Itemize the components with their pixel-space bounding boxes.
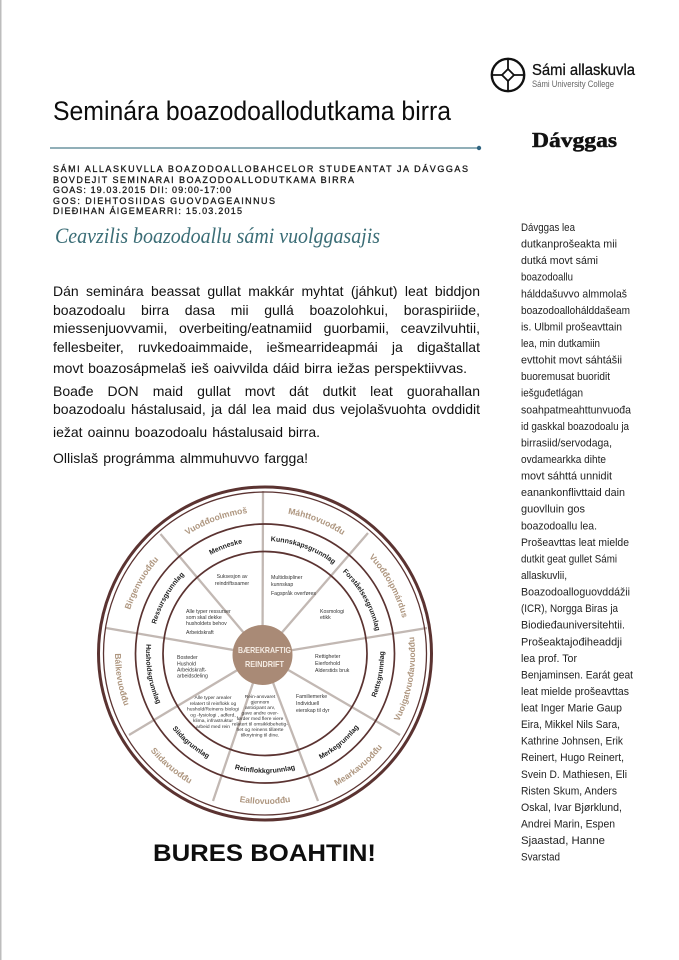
side column text: Prošeavttas leat mielde — [521, 537, 629, 549]
body paragraphs: boazodoalu birra dasa mii gullá boazolohkui, boraspiriide, — [53, 302, 480, 318]
inner sector notes: Arbeidskraft — [186, 630, 214, 636]
inner sector notes: husholdets behov — [186, 621, 227, 627]
side column text: Kathrine Johnsen, Erik — [521, 736, 624, 748]
side column text: buoremusat buoridit — [521, 371, 610, 383]
center: BÆREKRAFTIG REINDRIFT: BÆREKRAFTIG — [238, 645, 291, 655]
inner sector notes: Rein-ansvaret — [245, 694, 276, 700]
inner sector notes: Eierforhold — [315, 661, 340, 667]
inner sector notes: Alderstids bruk — [315, 668, 350, 674]
body paragraphs: boazodoalu hástalusaid, ja dál lea maid dus vejolašvuohta ovddidit — [53, 401, 480, 417]
inner sector notes: relatert til reinflokk og — [190, 701, 237, 707]
side column text: Sjaastad, Hanne — [521, 835, 605, 847]
side column text: iešguđetlágan — [521, 388, 583, 400]
side column text: Andrei Marin, Espen — [521, 818, 615, 830]
side column text: Biodieđauniversitehtii. — [521, 620, 625, 632]
center: BÆREKRAFTIG REINDRIFT — [232, 625, 292, 685]
body paragraphs: Ollislaš prográmma almmuhuvvo fargga! — [53, 450, 308, 466]
side column text: Dávggas lea — [521, 222, 575, 234]
inner sector notes: Multidisipliner — [271, 575, 303, 581]
event details — [53, 164, 468, 216]
event details: DIEÐIHAN ÁIGEMEARRI: 15.03.2015 — [53, 206, 242, 216]
side column text: Svein D. Mathiesen, Eli — [521, 769, 627, 781]
closing slogan: BURES BOAHTIN! — [153, 840, 376, 867]
inner sector notes: Suksesjon av — [217, 574, 248, 580]
event details: BOVDEJIT SEMINARAI BOAZODOALLODUTKAMA BIRRA — [53, 175, 354, 185]
side column text: movt sáhttá unnidit — [521, 471, 612, 483]
side column text: boazodoallohálddašeam — [521, 305, 630, 317]
side column text: id gaskkal boazodoalu ja — [521, 421, 629, 433]
inner sector notes: Familiemerke — [296, 694, 327, 700]
outer ring labels: Máhttovuođđu — [288, 508, 344, 535]
side column text: evttohit movt sáhtášii — [521, 355, 622, 367]
inner sector notes: Fagspråk overføres — [271, 590, 316, 597]
inner sector notes: som skal dekke — [186, 615, 222, 621]
middle ring labels: Kunnskapsgrunnlag — [271, 536, 336, 564]
body paragraphs: fellesbeiter, ruvkedoaimmaide, iešmearrideapmái ja digaštallat — [53, 339, 480, 355]
inner sector notes: Alle typer arealer — [195, 695, 232, 701]
side column text: lea, min dutkamiin — [521, 338, 600, 350]
inner sector notes: Kosmologi — [320, 609, 344, 615]
event details: GOS: DIEHTOSIIDAS GUOVDAGEAINNUS — [53, 196, 275, 206]
side column text: lea prof. Tor — [521, 653, 577, 665]
logo: Sámi allaskuvla — [492, 59, 635, 91]
outer ring labels: Eallovuođđu — [240, 796, 290, 804]
side column text: leat mielde prošeavttas — [521, 686, 629, 698]
logo: Sámi allaskuvla: Sámi University College — [532, 79, 614, 90]
inner sector notes: reindriftssamer — [215, 581, 249, 587]
body paragraphs: miessenjuovvamii, overbeiting/eatnamiid guorbamii, ceavzilvuhtii, — [53, 320, 480, 336]
inner sector notes: kunnskap — [271, 582, 293, 588]
side column text: Eira, Mikkel Nils Sara, — [521, 719, 620, 731]
header rule with dot — [50, 146, 481, 150]
center: BÆREKRAFTIG REINDRIFT: REINDRIFT — [245, 659, 285, 669]
inner sector notes: etikk — [320, 615, 331, 621]
outer ring labels: Vuoigatvuođavuođđu — [394, 637, 416, 720]
middle ring labels: Menneske — [208, 540, 242, 555]
middle ring labels: Rettsgrunnlag — [371, 652, 386, 698]
middle ring labels — [146, 536, 386, 774]
side column text: dutkit geat gullet Sámi — [521, 553, 617, 565]
inner sector notes: gjennom — [251, 700, 269, 706]
side column text: eanankonflivttaid dain — [521, 487, 625, 499]
side column text: Svarstad — [521, 852, 560, 864]
inner sector notes: Hushold — [177, 662, 196, 668]
outer ring labels: Vuođđoipmárdus — [370, 553, 406, 618]
side column text: hálddašuvvo almmolaš — [521, 288, 627, 300]
side column text: ovdamearkka dihte — [521, 454, 606, 466]
body paragraphs: Dán seminára beassat gullat makkár myhtat (jáhkut) leat biddjon — [53, 283, 480, 299]
side column text: birrasiid/servodaga, — [521, 437, 612, 449]
inner sector notes: førder med flere viere — [237, 716, 284, 722]
side column text — [521, 222, 633, 864]
outer ring labels: Siidavuođđu — [151, 748, 192, 784]
middle ring labels: Reinflokkgrunnlag — [235, 764, 295, 774]
body paragraphs: iežat oainnu boazodoalu hástalusaid birra. — [53, 424, 320, 440]
inner sector notes: tilknytning til dine. — [241, 732, 279, 738]
title: Seminára boazodoallodutkama birra — [53, 96, 451, 126]
middle ring labels: Husholdsgrunnlag — [146, 644, 160, 704]
inner sector notes — [177, 574, 350, 738]
outer ring labels: Birgenvuođđu — [124, 557, 158, 610]
body paragraphs: movt boazosápmelaš ieš oaivvilda dáid birra iežas perspektiivvas. — [53, 360, 467, 376]
middle ring labels: Merkegrunnlag — [318, 725, 360, 759]
outer ring labels: Mearkavuođđu — [334, 744, 382, 786]
inner sector notes: hushold/Reinens biologi — [187, 706, 239, 712]
middle ring labels: Forståelsesgrunnlag — [342, 568, 380, 631]
event details: SÁMI ALLASKUVLLA BOAZODOALLOBAHCELOR STUDEANTAT JA DÁVGGAS — [53, 164, 468, 174]
logo: Sámi allaskuvla: Sámi allaskuvla — [532, 62, 635, 79]
side column text: (ICR), Norgga Biras ja — [521, 603, 618, 615]
inner sector notes: het og reinens tillærte — [236, 727, 284, 733]
side column text: guovlluin gos — [521, 504, 585, 516]
side column text: boazodoallu — [521, 272, 573, 284]
side column text: soahpatmeahttunvuođa — [521, 404, 631, 416]
event details: GOAS: 19.03.2015 DII: 09:00-17:00 — [53, 185, 231, 195]
side column text: boazodoallu lea. — [521, 520, 597, 532]
outer ring labels: Vuođđoolmmoš — [184, 506, 247, 534]
rings — [98, 487, 432, 820]
middle ring labels: Ressursgrunnlag — [152, 572, 185, 624]
inner sector notes: og -fysiologi , adferd, — [190, 712, 236, 718]
body paragraphs — [53, 283, 480, 466]
inner sector notes: arbeidsdeling — [177, 674, 208, 680]
side column text: Prošeaktajođiheaddji — [521, 636, 622, 648]
side column text: leat Inger Marie Gaup — [521, 702, 622, 714]
middle ring labels: Siidagrunnlag — [173, 726, 210, 759]
inner sector notes: arbeid med rein — [196, 724, 230, 730]
inner sector notes: eierskap til dyr — [296, 708, 330, 714]
outer ring labels — [115, 506, 416, 804]
inner sector notes: Bosteder — [177, 655, 198, 661]
inner sector notes: klima, infrastruktur — [193, 718, 233, 724]
subtitle: Ceavzilis boazodoallu sámi vuolggasajis — [55, 223, 380, 248]
inner sector notes: Alle typer ressurser — [186, 609, 231, 615]
icon: logo wheel — [492, 59, 524, 91]
inner sector notes: Individuell — [296, 701, 319, 707]
Dávggas wordmark: Dávggas — [532, 128, 617, 152]
side column text: Oskal, Ivar Bjørklund, — [521, 802, 622, 814]
side column text: is. Ulbmil prošeavttain — [521, 321, 622, 333]
side column text: Boazodoalloguovddážii — [521, 586, 630, 598]
side column text: allaskuvlii, — [521, 570, 567, 582]
inner sector notes: Arbeidskraft- — [177, 668, 207, 674]
side column text: Benjaminsen. Earát geat — [521, 669, 633, 681]
inner sector notes: Rettigheter — [315, 654, 341, 660]
side column text: dutká movt sámi — [521, 255, 598, 267]
inner sector notes: relatert til omsikktbehetig- — [232, 722, 288, 728]
inner sector notes: gave andre over- — [242, 710, 279, 716]
outer ring labels: Bálkevuođđu — [115, 654, 128, 706]
side column text: dutkanprošeakta mii — [521, 239, 617, 251]
body paragraphs: Boađe DON maid gullat movt dát dutkit leat guorahallan — [53, 383, 480, 399]
spokes — [106, 491, 427, 801]
reindeer husbandry wheel diagram — [97, 486, 433, 822]
side column text: Reinert, Hugo Reinert, — [521, 752, 624, 764]
inner sector notes: anticipant arv, — [245, 705, 275, 711]
side column text: Risten Skum, Anders — [521, 785, 617, 797]
